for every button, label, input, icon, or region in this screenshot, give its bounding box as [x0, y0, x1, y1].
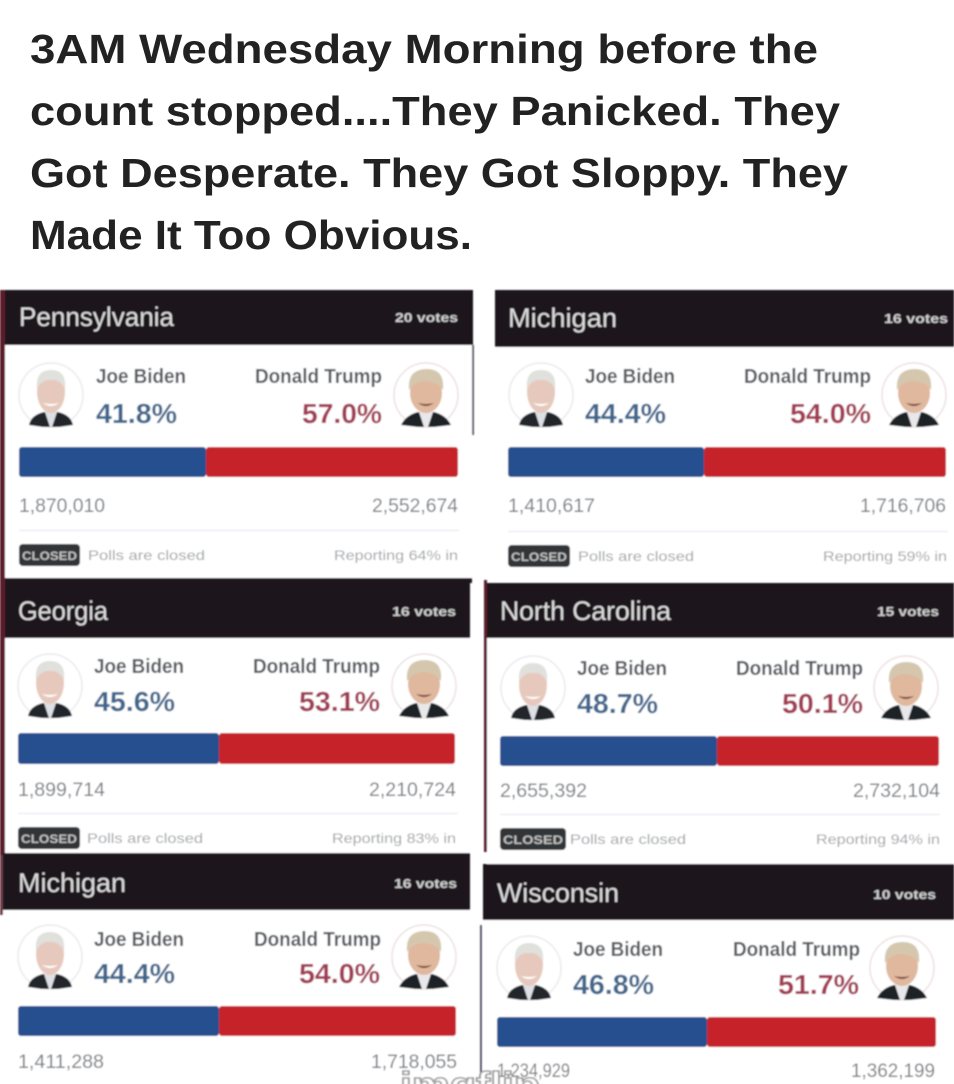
panel: Michigan (top right): 44.4% [585, 398, 666, 429]
panel: Georgia: Reporting 83% in [332, 830, 456, 846]
panel: Michigan (top right) [495, 290, 954, 580]
panel: Wisconsin: Donald Trump [733, 939, 860, 961]
panel: Georgia: 53.1% [299, 686, 380, 717]
panel: Georgia: Georgia [18, 596, 109, 626]
title: 3AM Wednesday Morning before the [30, 26, 818, 72]
panel: Georgia: 1,899,714 [18, 780, 105, 801]
panel: Georgia: 16 votes [392, 604, 456, 619]
panel: Pennsylvania: Joe Biden [96, 366, 186, 388]
panel: Pennsylvania: 1,870,010 [19, 496, 105, 517]
panel: North Carolina: 2,732,104 [853, 781, 940, 802]
panel: Pennsylvania: Reporting 64% in [334, 547, 458, 563]
panel: North Carolina: CLOSED [503, 833, 563, 847]
panel: Michigan (top right): CLOSED [511, 550, 567, 564]
panel: Michigan (top right): 16 votes [884, 311, 948, 326]
title: count stopped....They Panicked. They [30, 88, 840, 134]
panel: Wisconsin: Wisconsin [497, 878, 619, 908]
panel: Michigan (top right): 54.0% [790, 398, 871, 429]
panel: North Carolina: 15 votes [877, 604, 939, 619]
panel: North Carolina: Joe Biden [577, 658, 667, 680]
panel: Pennsylvania: Pennsylvania [19, 302, 175, 332]
panel: Michigan (bottom left): Joe Biden [94, 929, 184, 951]
panel: Michigan (bottom left): Michigan [18, 868, 126, 898]
panel: North Carolina: Donald Trump [736, 658, 863, 680]
panel: Georgia: Polls are closed [87, 830, 203, 846]
panel: North Carolina: 2,655,392 [500, 781, 587, 802]
panel: North Carolina: Reporting 94% in [816, 831, 940, 847]
panel: Michigan (bottom left): 1,411,288 [18, 1052, 104, 1073]
panel: Pennsylvania: 2,552,674 [372, 496, 458, 517]
panel: Pennsylvania: Polls are closed [88, 547, 205, 563]
panel: Michigan (top right): Donald Trump [744, 366, 871, 388]
panel: Wisconsin: 46.8% [573, 969, 654, 1000]
title: Got Desperate. They Got Sloppy. They [30, 150, 848, 196]
panel: Georgia: 2,210,724 [369, 780, 456, 801]
panel: Pennsylvania: 20 votes [395, 310, 458, 325]
panel: Georgia [5, 583, 470, 854]
panel: Wisconsin: 1,362,199 [851, 1061, 935, 1082]
panel: Georgia: Joe Biden [94, 656, 184, 678]
panel: Wisconsin: 51.7% [778, 969, 859, 1000]
panel: North Carolina [484, 580, 954, 864]
panel: Pennsylvania [0, 290, 474, 855]
panel: Pennsylvania: 41.8% [96, 398, 177, 429]
panel: Georgia: CLOSED [21, 832, 77, 846]
panel: Michigan (top right): Michigan [508, 303, 617, 333]
panel: Michigan (top right): 1,410,617 [508, 496, 595, 517]
panel: Georgia: Donald Trump [253, 656, 380, 678]
panel: North Carolina: 48.7% [577, 688, 658, 719]
panel: Wisconsin [480, 864, 954, 1084]
panel: Pennsylvania: 57.0% [302, 398, 382, 429]
panel: Pennsylvania: Donald Trump [255, 366, 382, 388]
title [30, 26, 848, 258]
panel: Michigan (bottom left): 1,718,055 [371, 1052, 457, 1073]
panel: Michigan (top right): Joe Biden [585, 366, 675, 388]
panel: Georgia: 45.6% [94, 686, 175, 717]
panel: Pennsylvania: CLOSED [22, 549, 77, 563]
panel: Michigan (bottom left) [0, 853, 474, 1084]
panel: Wisconsin: Joe Biden [573, 939, 663, 961]
panel: North Carolina: North Carolina [500, 596, 672, 626]
panel: Michigan (bottom left): 44.4% [94, 958, 175, 989]
panel: Michigan (bottom left): 16 votes [394, 876, 457, 891]
panel: North Carolina: Polls are closed [570, 831, 686, 847]
panel: Michigan (top right): 1,716,706 [860, 496, 946, 517]
panel: Michigan (top right): Polls are closed [578, 548, 694, 564]
panel: Michigan (bottom left): Donald Trump [254, 929, 381, 951]
title: Made It Too Obvious. [30, 212, 472, 258]
panel: Wisconsin: 1,234,929 [497, 1061, 570, 1082]
panel: Michigan (top right): Reporting 59% in [823, 548, 947, 564]
panel: Wisconsin: 10 votes [873, 887, 936, 902]
panel: Michigan (bottom left): 54.0% [299, 958, 380, 989]
panel: North Carolina: 50.1% [782, 688, 863, 719]
